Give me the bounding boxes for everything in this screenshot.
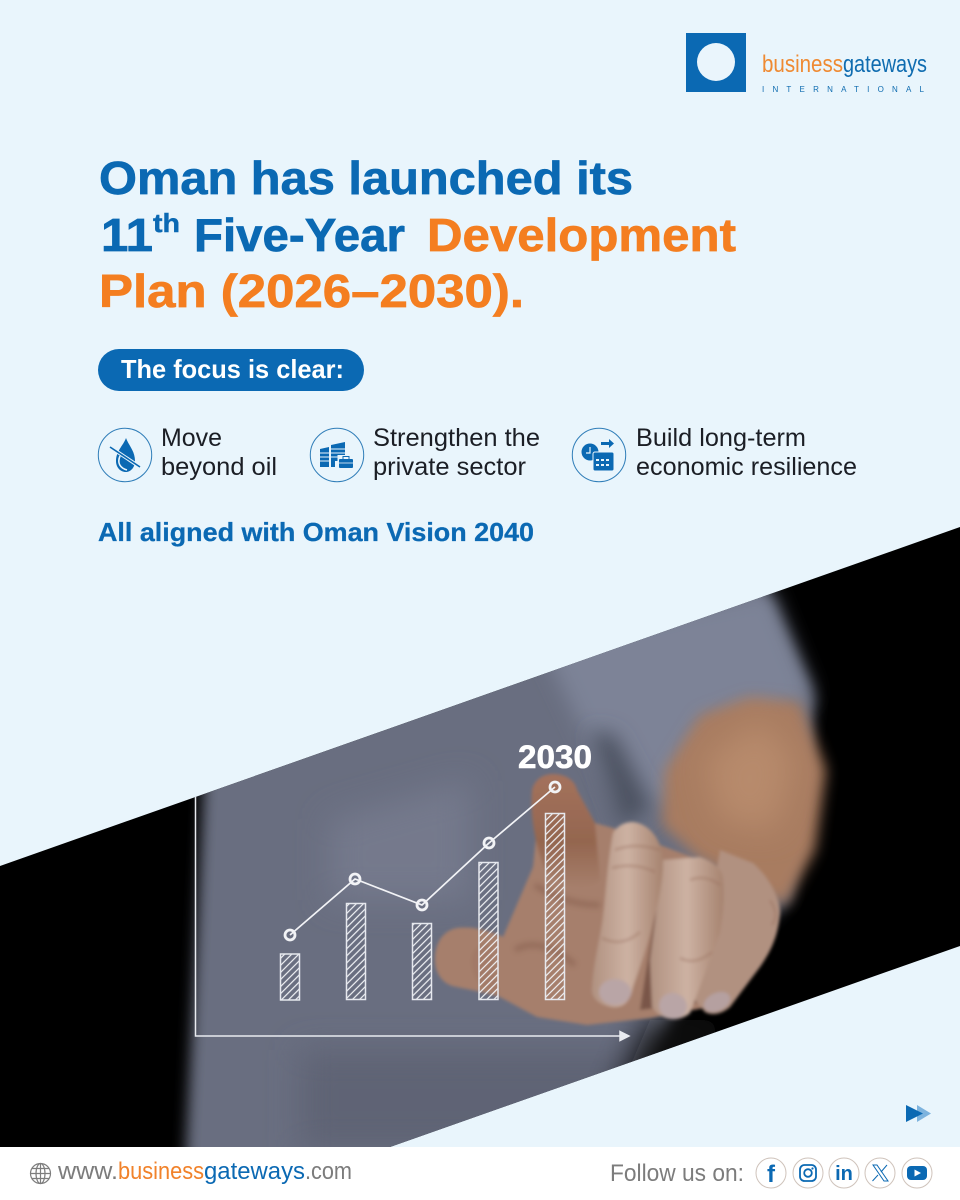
focus item: strengthen the private sector	[310, 424, 540, 482]
chart label: 2030: 2030	[518, 739, 592, 775]
icon: facebook: f	[767, 1161, 776, 1188]
icon: linkedin	[829, 1158, 859, 1188]
icon: instagram	[793, 1158, 823, 1188]
focus item: move beyond oil: Move	[161, 424, 222, 452]
pill: the focus is clear: The focus is clear:	[121, 354, 344, 384]
title: Oman has launched its	[99, 152, 633, 204]
title	[99, 152, 736, 317]
icon: youtube	[902, 1158, 932, 1188]
footer: website: www.	[57, 1158, 118, 1185]
focus item: strengthen the private sector: private sector	[373, 453, 526, 481]
footer: website: business	[118, 1158, 204, 1185]
focus item: build long-term economic resilience: economic resilience	[636, 453, 857, 481]
focus item: move beyond oil: beyond oil	[161, 453, 277, 481]
logo: business gateways international: INTERNATIONAL	[762, 85, 925, 94]
footer: website	[30, 1158, 352, 1185]
text: aligned with Oman Vision 2040: All aligned with Oman Vision 2040	[98, 517, 534, 547]
footer: website: gateways	[204, 1158, 305, 1185]
icon: facebook	[756, 1158, 786, 1188]
bars	[280, 814, 564, 1000]
title: 11	[101, 209, 153, 261]
footer bar	[0, 1147, 960, 1200]
chart: bars and trend line	[196, 782, 629, 1040]
icon: linkedin: in	[835, 1163, 853, 1185]
icon: X	[865, 1158, 895, 1188]
photo: hand pointing at chart	[0, 500, 960, 1170]
chart axes	[196, 790, 629, 1040]
footer: website: .com	[305, 1158, 352, 1185]
title: Development	[427, 209, 736, 261]
title: th	[153, 208, 180, 238]
focus item: strengthen the private sector: Strengthen the	[373, 424, 540, 452]
arrow: next	[906, 1105, 931, 1122]
focus item: build long-term economic resilience	[572, 424, 857, 482]
title: Plan (2026–2030).	[99, 265, 524, 317]
trend line	[285, 782, 560, 940]
pill: the focus is clear	[98, 349, 364, 391]
logo: business gateways international: gateways	[843, 51, 927, 78]
logo: business gateways international: business	[762, 51, 843, 78]
focus item: move beyond oil	[98, 424, 277, 482]
logo: business gateways international	[686, 33, 927, 94]
title: Five-Year	[194, 209, 405, 261]
footer: follow us: Follow us on:	[610, 1160, 744, 1187]
focus item: build long-term economic resilience: Build long-term	[636, 424, 806, 452]
